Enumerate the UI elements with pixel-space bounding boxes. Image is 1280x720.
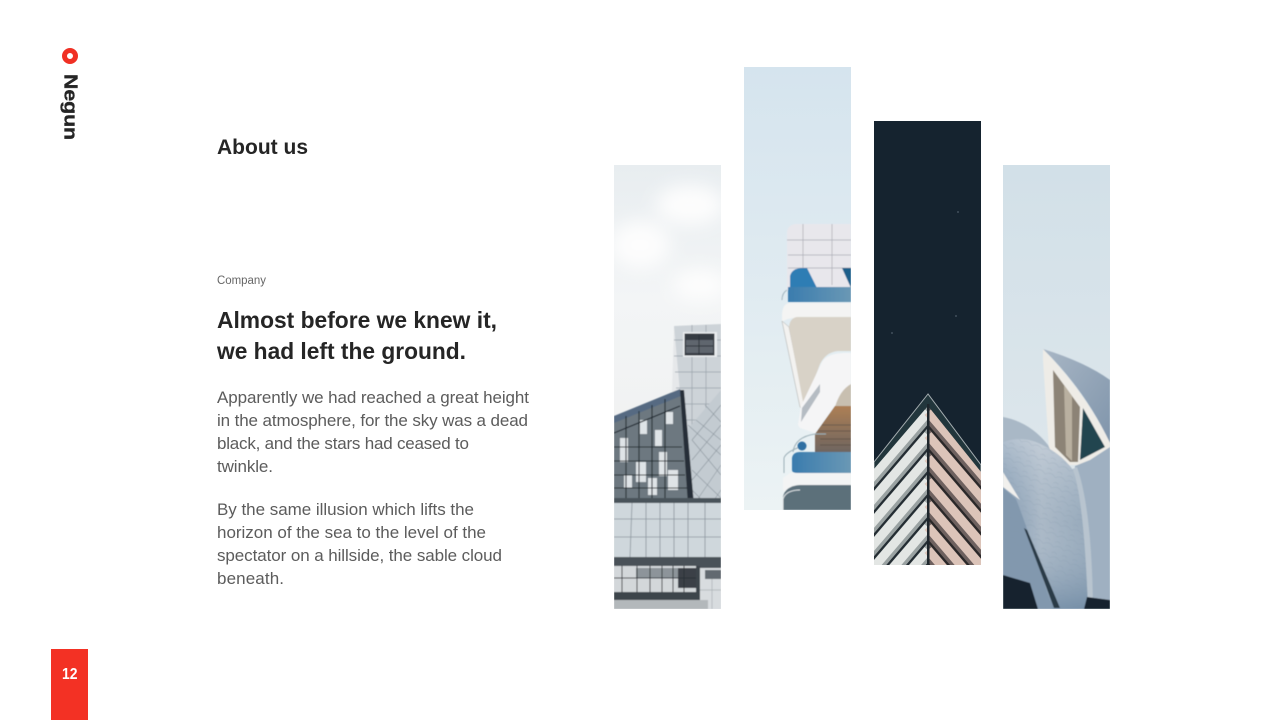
brand name: Negun — [60, 74, 80, 140]
image: dark sky tower — [874, 121, 981, 565]
heading: we had left the ground. — [216, 338, 466, 364]
paragraph one: twinkle. — [217, 457, 273, 476]
heading: Almost before we knew it, — [217, 307, 497, 333]
paragraph two: beneath. — [217, 569, 284, 588]
image: glass tower — [610, 165, 728, 609]
paragraph two: spectator on a hillside, the sable cloud — [217, 546, 502, 565]
paragraph one — [217, 388, 529, 476]
paragraph two: By the same illusion which lifts the — [217, 500, 474, 519]
brand logo — [60, 50, 80, 140]
title: About us — [217, 136, 308, 159]
paragraph two — [217, 500, 502, 588]
paragraph one: Apparently we had reached a great height — [217, 388, 529, 407]
page number badge: 12 — [62, 666, 78, 683]
image: opera house sails — [1003, 165, 1110, 609]
paragraph two: horizon of the sea to the level of the — [217, 523, 486, 542]
paragraph one: in the atmosphere, for the sky was a dead — [217, 411, 528, 430]
page number badge — [51, 649, 88, 720]
icon: red ring — [64, 50, 76, 62]
image: white balconies — [744, 67, 851, 510]
paragraph one: black, and the stars had ceased to — [217, 434, 469, 453]
eyebrow label: Company — [217, 275, 266, 287]
heading — [216, 307, 497, 364]
